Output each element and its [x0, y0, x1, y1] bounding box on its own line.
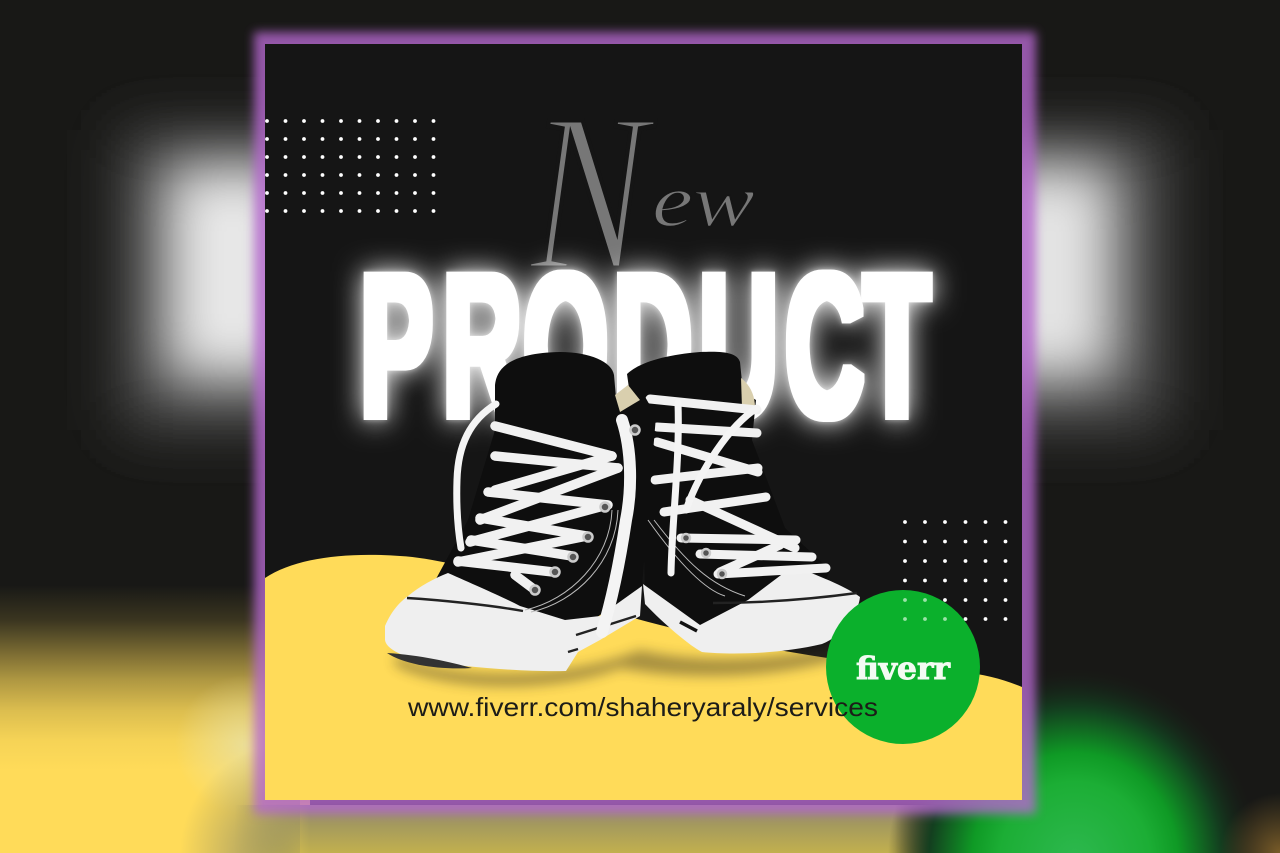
right shoe eyelets: [682, 534, 726, 578]
left shoe: [385, 352, 656, 671]
dot grid top left: [265, 119, 435, 213]
left shoe loose lace: [457, 404, 496, 548]
right shoe rubber stripe: [713, 593, 857, 603]
yellow wave: [265, 555, 1022, 800]
script word New: [531, 122, 754, 266]
right shoe sole: [643, 566, 860, 653]
right shoe lining: [741, 378, 755, 408]
right shoe laces: [650, 399, 826, 574]
script word New: ew: [652, 161, 755, 243]
dot grid bottom right: [903, 520, 1007, 621]
left shoe sole: [385, 573, 642, 671]
fiverr badge: [826, 590, 980, 744]
shoe shadow: [395, 640, 850, 686]
left shoe stitching: [525, 510, 618, 612]
heading PRODUCT glow: PRODUCT: [360, 231, 930, 460]
script word New: N: [528, 66, 656, 317]
fiverr wordmark: fiverr: [856, 651, 951, 687]
left shoe laces: [458, 426, 618, 590]
dots showing through badge: [903, 598, 947, 621]
left shoe lining: [615, 385, 640, 412]
right shoe collar and upper: [627, 352, 756, 452]
main panel: [265, 44, 1022, 800]
left shoe rubber stripe: [407, 598, 636, 652]
right shoe stitching: [648, 520, 745, 596]
left shoe eyelets: [530, 426, 640, 594]
purple glow frame: [254, 32, 1036, 814]
left shoe sole underside: [387, 653, 472, 668]
right shoe: [627, 352, 860, 653]
left shoe collar and upper: [430, 352, 656, 622]
website url: www.fiverr.com/shaheryaraly/services: [407, 692, 878, 722]
right shoe loose lace: [671, 403, 757, 573]
